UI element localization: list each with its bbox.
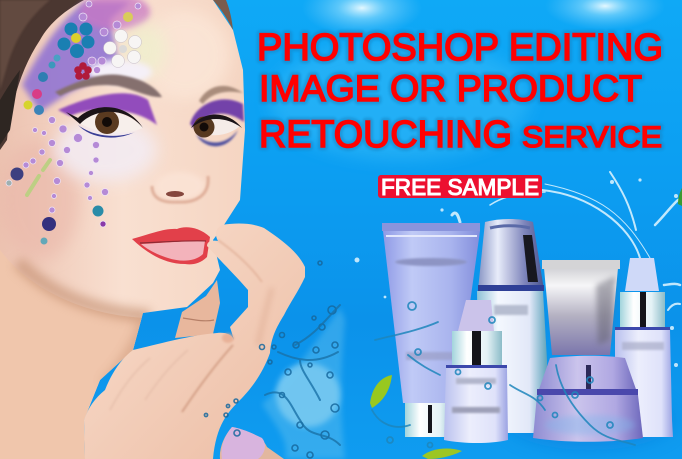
- title: IMAGE OR PRODUCT: [259, 68, 642, 109]
- water arc and droplets right: [354, 172, 680, 367]
- portrait: face and neck: [0, 0, 245, 459]
- title: soft blue outline: SERVICE: [522, 121, 662, 154]
- title: SERVICE: [522, 121, 662, 154]
- nose: [152, 172, 208, 202]
- product: pump bottle right: [615, 258, 673, 437]
- lips: [132, 227, 210, 264]
- product: silver tube: [542, 260, 620, 355]
- title: soft blue outline: PHOTOSHOP EDITING: [257, 27, 663, 69]
- product: small bottle front: [444, 300, 508, 443]
- product: large tube: [382, 223, 480, 437]
- title: RETOUCHING: [259, 114, 512, 156]
- title: soft blue outline: IMAGE OR PRODUCT: [259, 68, 642, 109]
- badge: free sample: FREE SAMPLE: [381, 174, 539, 200]
- hand: thumb behind: [175, 280, 220, 338]
- title: soft blue outline: RETOUCHING: [259, 114, 512, 156]
- water splash over products: [372, 302, 635, 448]
- hair: [0, 0, 233, 150]
- title: [257, 27, 663, 156]
- title: PHOTOSHOP EDITING: [257, 27, 663, 69]
- title: soft blue outline: [257, 27, 663, 156]
- makeup: purple eyeshadow and eyes: [22, 0, 244, 182]
- product: wide jar: [533, 356, 643, 442]
- purple cloth at wrist: [220, 427, 284, 459]
- hand: fingers and back of hand: [84, 224, 305, 459]
- leaf accents: [370, 188, 682, 459]
- icon: gem flowers and rhinestones: [6, 1, 142, 244]
- product: tall glass bottle: [477, 219, 547, 433]
- water splash left: [204, 261, 345, 459]
